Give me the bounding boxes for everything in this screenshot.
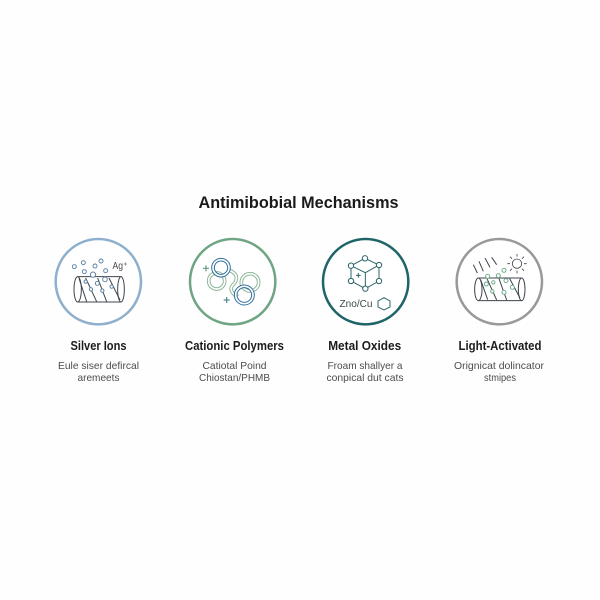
panel: silver ions: [56, 239, 141, 384]
description: silver ions: aremeets: [78, 372, 120, 384]
description: metal oxides: conpical dut cats: [326, 372, 404, 384]
icon: silver ions circle: [56, 239, 141, 324]
description: silver ions: [58, 360, 139, 384]
icon: metal oxides circle: [323, 239, 408, 324]
description: metal oxides: Froam shallyer a: [328, 360, 403, 372]
description: cationic polymers: Chiostan/PHMB: [199, 372, 270, 384]
description: silver ions: Eule siser defircal: [58, 360, 139, 372]
heading: metal oxides: Metal Oxides: [328, 339, 401, 353]
panel: light-activated: [454, 239, 544, 384]
description: light-activated: stmipes: [484, 372, 516, 384]
description: cationic polymers: [199, 360, 270, 384]
description: cationic polymers: Catiotal Poind: [202, 360, 267, 372]
icon: light-activated circle: [457, 239, 542, 324]
heading: cationic polymers: Cationic Polymers: [185, 339, 284, 353]
heading: light-activated: Light-Activated: [458, 339, 542, 353]
description: light-activated: [454, 360, 544, 384]
description: light-activated: Orignicat dolincator: [454, 360, 544, 372]
description: metal oxides: [326, 360, 404, 384]
title: Antimibobial Mechanisms: [198, 193, 398, 212]
label: ZnO/Cu: Zno/Cu: [340, 298, 373, 310]
panel: cationic polymers: [185, 239, 284, 384]
icon: cationic polymers circle: [190, 239, 275, 324]
panel: metal oxides: [323, 239, 408, 384]
heading: silver ions: Silver Ions: [70, 339, 127, 353]
label: Ag+: Ag⁺: [112, 261, 128, 272]
